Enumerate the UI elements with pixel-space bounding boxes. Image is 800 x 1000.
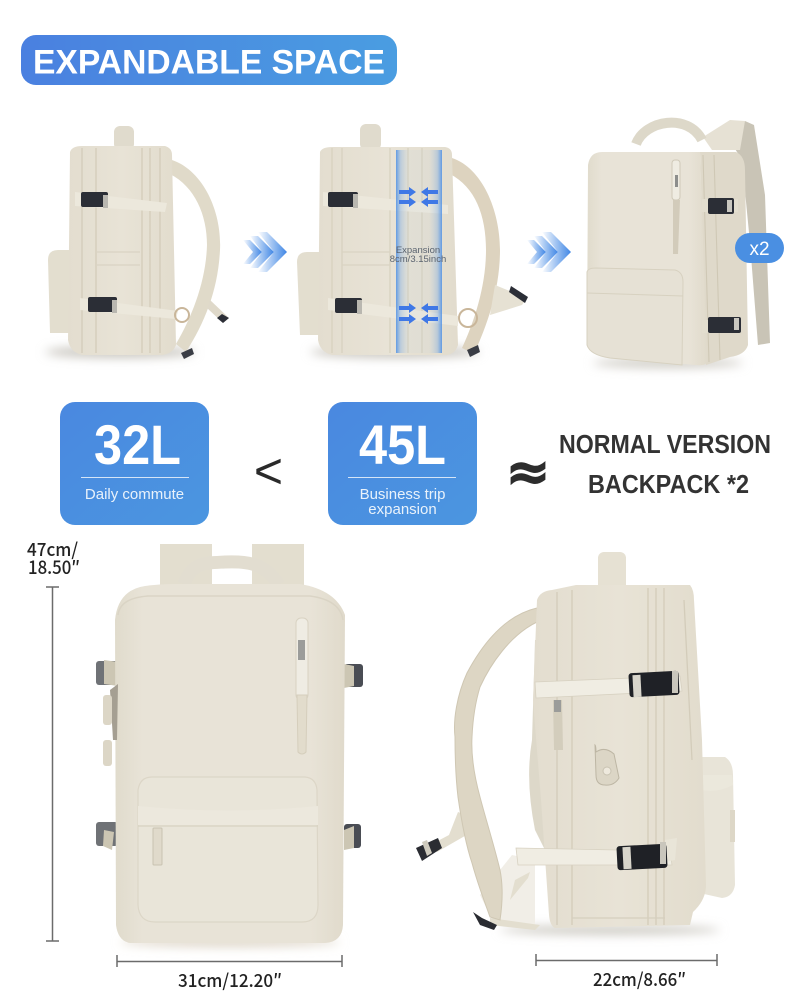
front pocket [138,777,318,922]
expansion arrows [399,187,438,324]
vertical zipper [296,618,308,754]
capacity card: 45L: 45L [359,413,446,476]
equivalence text: BACKPACK *2 [588,471,749,499]
backpack side view: expanded [297,124,528,358]
width dimension: side [536,954,717,992]
arrow: chevrons [527,232,571,272]
backpack 3/4 view: expanded [587,120,784,368]
USB port [595,745,619,785]
less than sign: < [254,443,283,499]
capacity card: 32L [60,402,209,525]
main body [115,584,345,943]
side buckles [96,660,363,850]
backpack side view: normal size [45,126,229,359]
capacity card: 32L: Daily commute [85,486,184,503]
width dimension: side: 22cm/8.66″ [593,966,686,992]
left zipper pulls [103,684,118,766]
lower compression strap [516,838,677,870]
height dimension: 18.50″ [28,554,80,580]
arrow: chevrons [243,232,287,272]
upper compression strap [535,671,682,698]
approximately equal sign: ≈ [505,440,551,503]
expansion band [396,150,442,353]
top handle [184,562,279,585]
width dimension: front [117,955,342,993]
height dimension: 47cm/ [27,536,78,562]
side pocket [700,757,735,898]
x2 badge: x2 [749,239,770,260]
expansion label: Expansion [396,245,440,256]
large backpack: side view [416,552,735,935]
capacity card: 32L: 32L [94,413,181,476]
shoulder straps [160,544,304,589]
side zipper [553,700,563,750]
height dimension [27,536,80,941]
capacity card: 45L: Business trip [360,486,445,503]
title banner: expandable space: EXPANDABLE SPACE [33,44,385,82]
rear strap and lower webbing [480,855,535,925]
width dimension: front: 31cm/12.20″ [178,967,282,993]
carry handle [598,552,626,592]
shoulder strap [454,608,537,920]
main body [533,585,706,928]
equivalence text [559,431,771,499]
equivalence text: NORMAL VERSION [559,431,771,459]
x2 badge [735,233,784,263]
large backpack: front view [96,544,363,947]
capacity card: 45L [328,402,477,525]
back panel [529,640,550,860]
capacity card: 45L: expansion [368,501,437,518]
expansion label: 8cm/3.15inch [390,254,446,265]
